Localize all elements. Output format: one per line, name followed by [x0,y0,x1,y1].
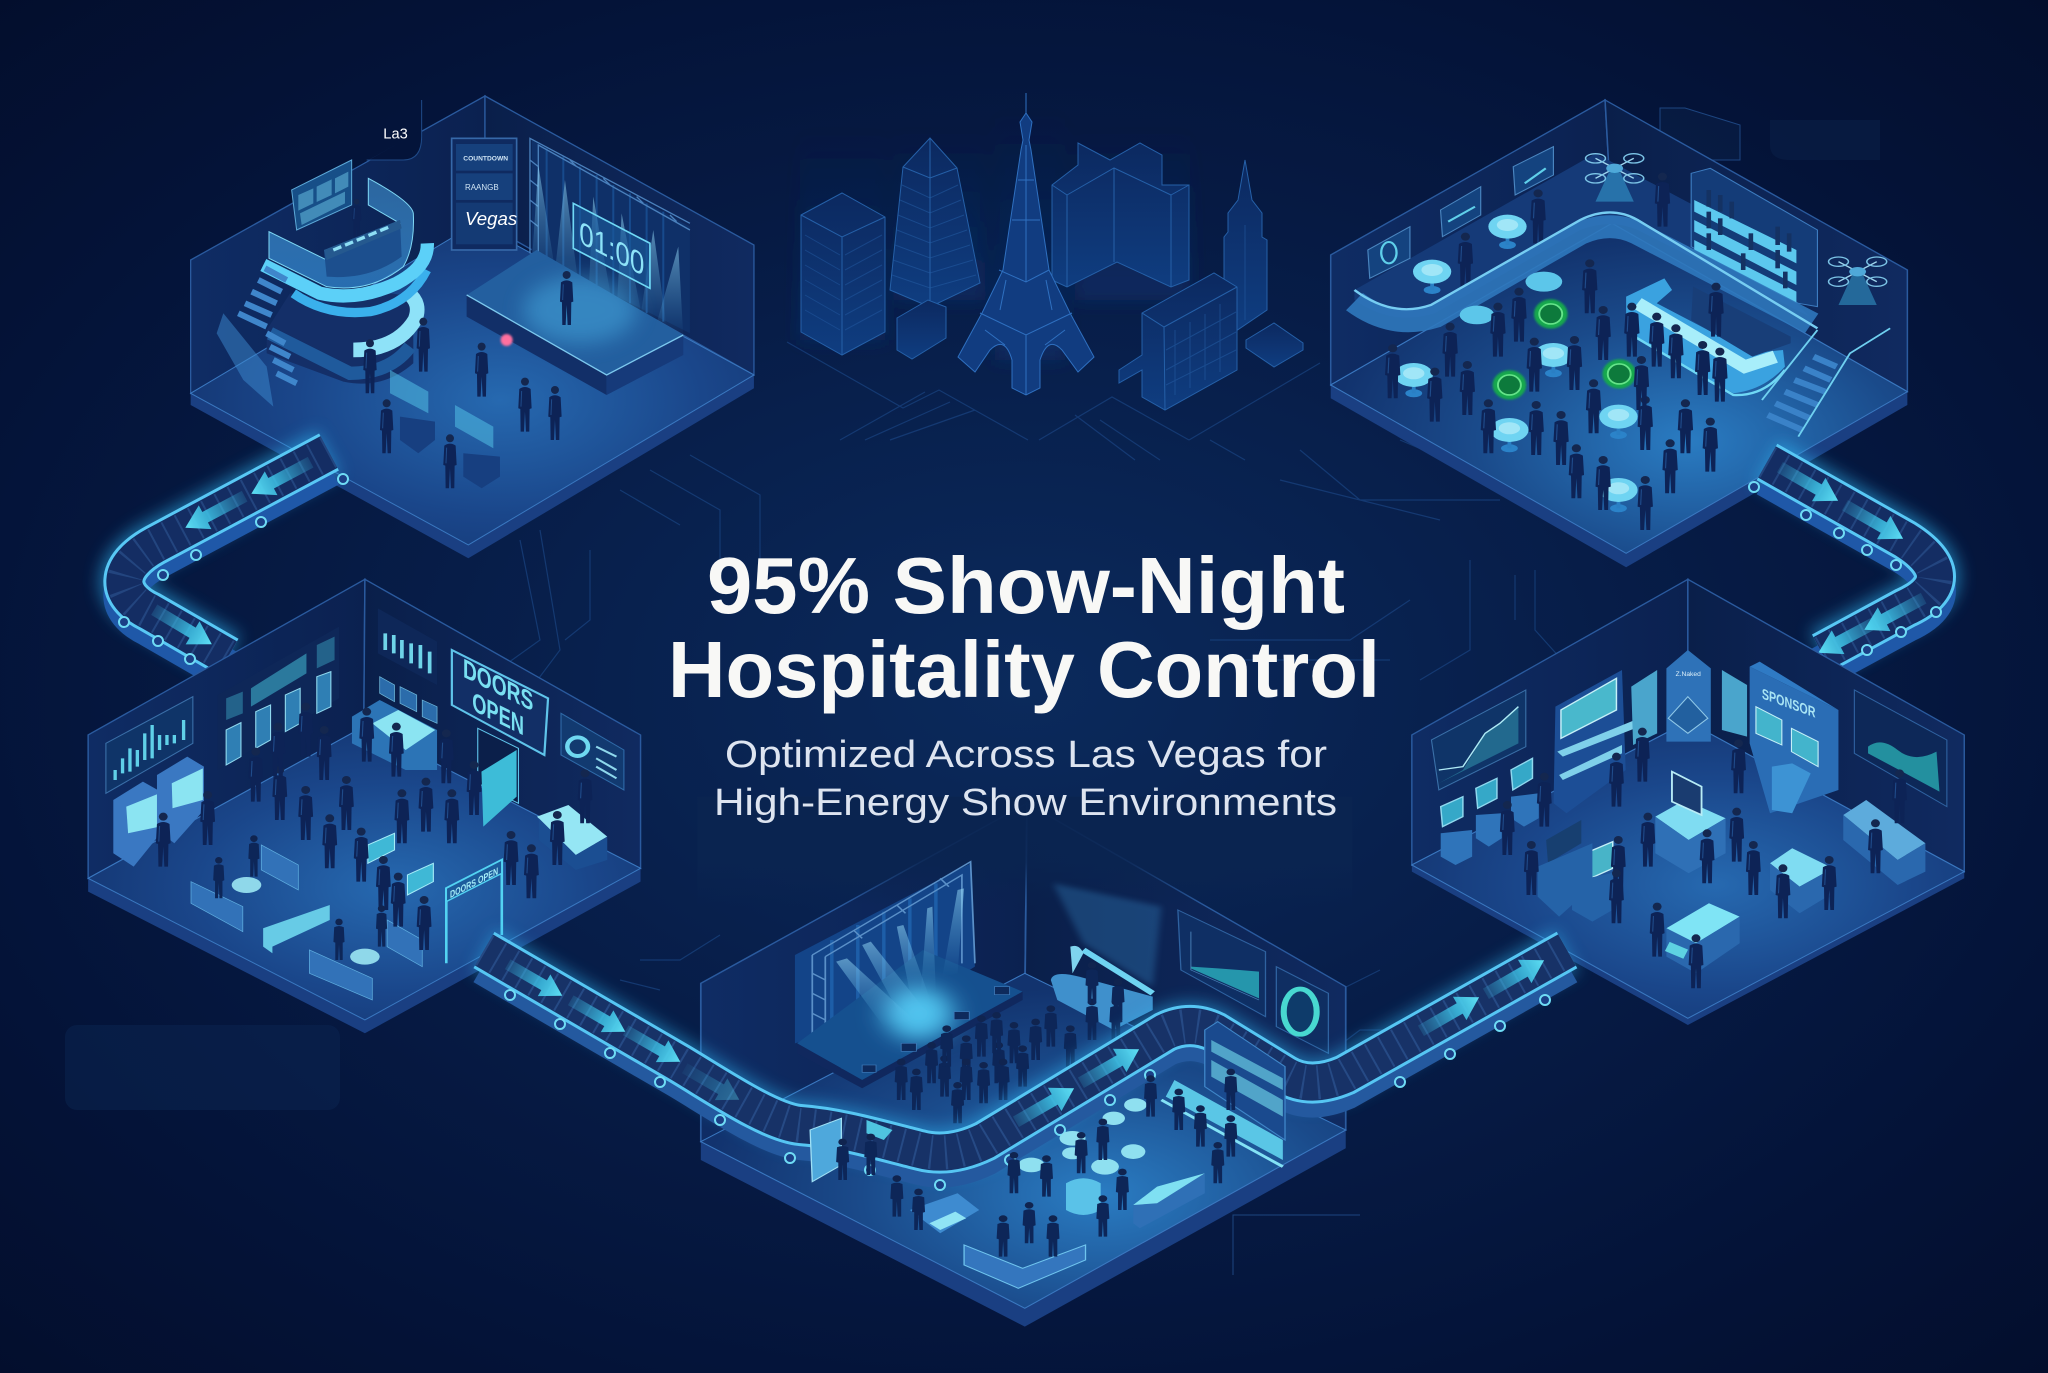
presenter and guests [363,271,573,488]
mezzanine floor [1354,153,1810,318]
back curtain [532,140,690,333]
panel: bottom-left ghost card [65,1025,340,1110]
sponsor booth [1750,662,1838,813]
vending machines [113,757,204,867]
countdown display [573,203,650,288]
glowing lower counter [270,333,410,373]
mezzanine glass rail [1354,212,1817,328]
building: striped box tower [801,193,885,355]
monitor stations [1538,820,1618,922]
arrow: conveyor direction 12 [1009,1077,1081,1133]
arrow: conveyor direction 1 [245,450,317,506]
mezzanine tables [1413,215,1527,294]
entrance kiosk [810,1118,893,1182]
crowd [1385,259,1728,530]
arrow: conveyor direction 2 [179,484,251,540]
floor [701,973,1346,1308]
wall gallery board [218,627,339,770]
line chart screen [1431,690,1526,790]
conveyor: reception lounge to sponsor hall [1749,456,1941,667]
stage platform [797,950,1023,1088]
panel: reception lounge (top right) [1331,100,1907,567]
title and subtitle block [668,541,1380,824]
wall screen glyphs [1381,168,1546,263]
floor [191,223,754,545]
floating tags [368,833,433,895]
bar counter [1626,278,1791,395]
sponsor wall centre totem: Z.Naked [1676,671,1701,678]
arrow: conveyor direction 6 [1858,586,1930,642]
gauge screen [561,713,624,790]
doors open sign [452,650,548,755]
truss [812,862,975,1048]
circuit lines [505,342,1580,1060]
conveyor: entry hall to sponsor hall through show floor [484,949,1567,1190]
arrow: conveyor direction 11 [678,1057,746,1111]
panel: main show floor (bottom centre) [697,797,1352,1327]
guests [156,703,592,960]
doors open sign: DOORS [463,654,533,718]
panel: countdown stage room (top left) [191,96,754,558]
product display wall [1554,670,1657,813]
countdown signage: RAANGB [465,183,499,192]
stage curtain [795,863,975,1043]
lounge bar [263,905,330,953]
title: Hospitality Control [668,625,1380,714]
building: tapered glass tower [890,138,980,307]
doors open sign: OPEN [472,687,524,742]
upper bar [1051,946,1153,1030]
cocktail tables [1395,272,1638,512]
spotlights [836,888,964,1027]
equalizer wall board [378,608,437,685]
conveyor markers [505,990,1550,1190]
panel: top-right ghost card A [1660,108,1740,160]
stage spotlights [532,165,683,337]
mezzanine deck glow [263,243,427,313]
building: art-deco spire tower [1224,160,1267,333]
lower bar counter [1161,1080,1283,1167]
building: open-court tower [1052,143,1189,287]
label bubble: La3 [383,126,408,142]
right wall [1688,579,1964,872]
skyline glow columns [800,110,1190,360]
countdown signage: Vegas [465,208,517,229]
back bar shelving [1205,1022,1285,1140]
small terminals [1441,758,1539,865]
right desks [1770,800,1925,913]
room slab [1331,385,1907,567]
lounge seating [910,1193,1086,1288]
right wall [1025,803,1346,1130]
subtitle: Optimized Across Las Vegas for [725,734,1327,776]
right wall [485,96,754,375]
truss [530,138,690,253]
crowd [895,962,1125,1123]
monitor wall [292,160,352,230]
chart screen [1178,910,1265,1017]
arrow: conveyor direction 15 [1479,949,1551,1005]
show floor foreground [810,1022,1285,1288]
visitors [1500,728,1907,988]
room slab [88,868,641,1033]
right wall [1605,100,1907,392]
arrow: conveyor direction 13 [1074,1038,1146,1094]
lounge tables [232,877,380,965]
building: gridded hotel [1119,273,1237,410]
podium [1066,1178,1101,1215]
conveyor markers [119,474,348,664]
subtitle: High-Energy Show Environments [714,782,1337,824]
green status badges [1493,299,1636,400]
bottle shelving [1691,168,1817,307]
ambient light columns [1053,883,1161,987]
stage speakers [862,987,1010,1072]
conveyor: stage room to entry hall [119,450,348,671]
front demo table [1665,903,1740,973]
info kiosks [352,677,437,770]
skyline illustration [801,93,1303,410]
wall top fade [697,797,1352,907]
guests [836,1069,1237,1257]
bottles [1706,190,1791,288]
ring gauge screen [1276,967,1328,1053]
room slab [1412,865,1964,1025]
arrow: conveyor direction 9 [564,989,632,1043]
conveyor markers [1749,482,1941,655]
right wall [364,579,641,868]
arrow: conveyor direction 10 [619,1019,687,1073]
arrow: conveyor direction 5 [1838,494,1910,550]
countdown display: 01:00 [579,214,644,284]
left wall [1331,100,1612,385]
panel: top-right ghost card B [1770,120,1880,160]
staircase [1762,328,1890,437]
arrow: conveyor direction 4 [1773,456,1845,512]
centre demo counter [1655,772,1726,873]
mezzanine guests and drones [1458,154,1887,305]
entrance arch: DOORS OPEN [450,866,498,901]
title [668,541,1380,714]
panel: bottom-right ghost card [1233,1215,1360,1275]
check-in kiosks [390,370,500,488]
arrow: conveyor direction 3 [147,598,219,656]
stage platform [467,250,683,395]
catering table [1133,1173,1205,1228]
floor [88,727,641,1020]
panel: sponsor hall (middle right) [1412,579,1964,1025]
left wall [701,803,1027,1142]
entrance arch [446,860,502,963]
mezzanine glass rail [269,178,414,288]
area chart screen [1854,690,1947,807]
bar chart screen [106,697,193,793]
stair glass rail [217,313,273,407]
arrow: conveyor direction 14 [1414,986,1486,1042]
building: low block [1246,323,1303,367]
arrow: conveyor direction 8 [501,953,569,1007]
lower bar base [267,293,413,384]
sponsor booth: SPONSOR [1762,686,1816,721]
wall screens [1368,147,1553,278]
lounge sofas [191,845,422,1000]
cocktail rounds [1018,1098,1147,1175]
floor [1412,722,1964,1018]
countdown signage [452,138,517,250]
panel: entry hall with doors open (middle left) [88,579,641,1033]
building: small podium block [897,300,946,359]
floor [1331,223,1907,553]
doorway [478,728,518,827]
glowing counter top [353,293,417,350]
subtitle [714,734,1337,824]
room slab [701,1130,1346,1327]
arrow: conveyor direction 7 [1812,609,1884,665]
left wall [88,579,365,878]
title: 95% Show-Night [707,541,1345,630]
control console and operator [324,199,402,277]
countdown signage: COUNTDOWN [463,156,508,163]
left wall [191,96,485,393]
label bubble [350,100,422,171]
decorative corner panels [65,108,1880,1275]
room slab [191,375,754,558]
staircase [238,268,297,383]
sponsor wall centre totem [1666,650,1711,742]
landmark: Eiffel tower [958,93,1094,395]
curtain folds [547,148,663,322]
left wall [1412,579,1688,865]
gallery panel [1722,670,1747,737]
reception desk [537,805,607,870]
curtain folds [832,883,936,1023]
